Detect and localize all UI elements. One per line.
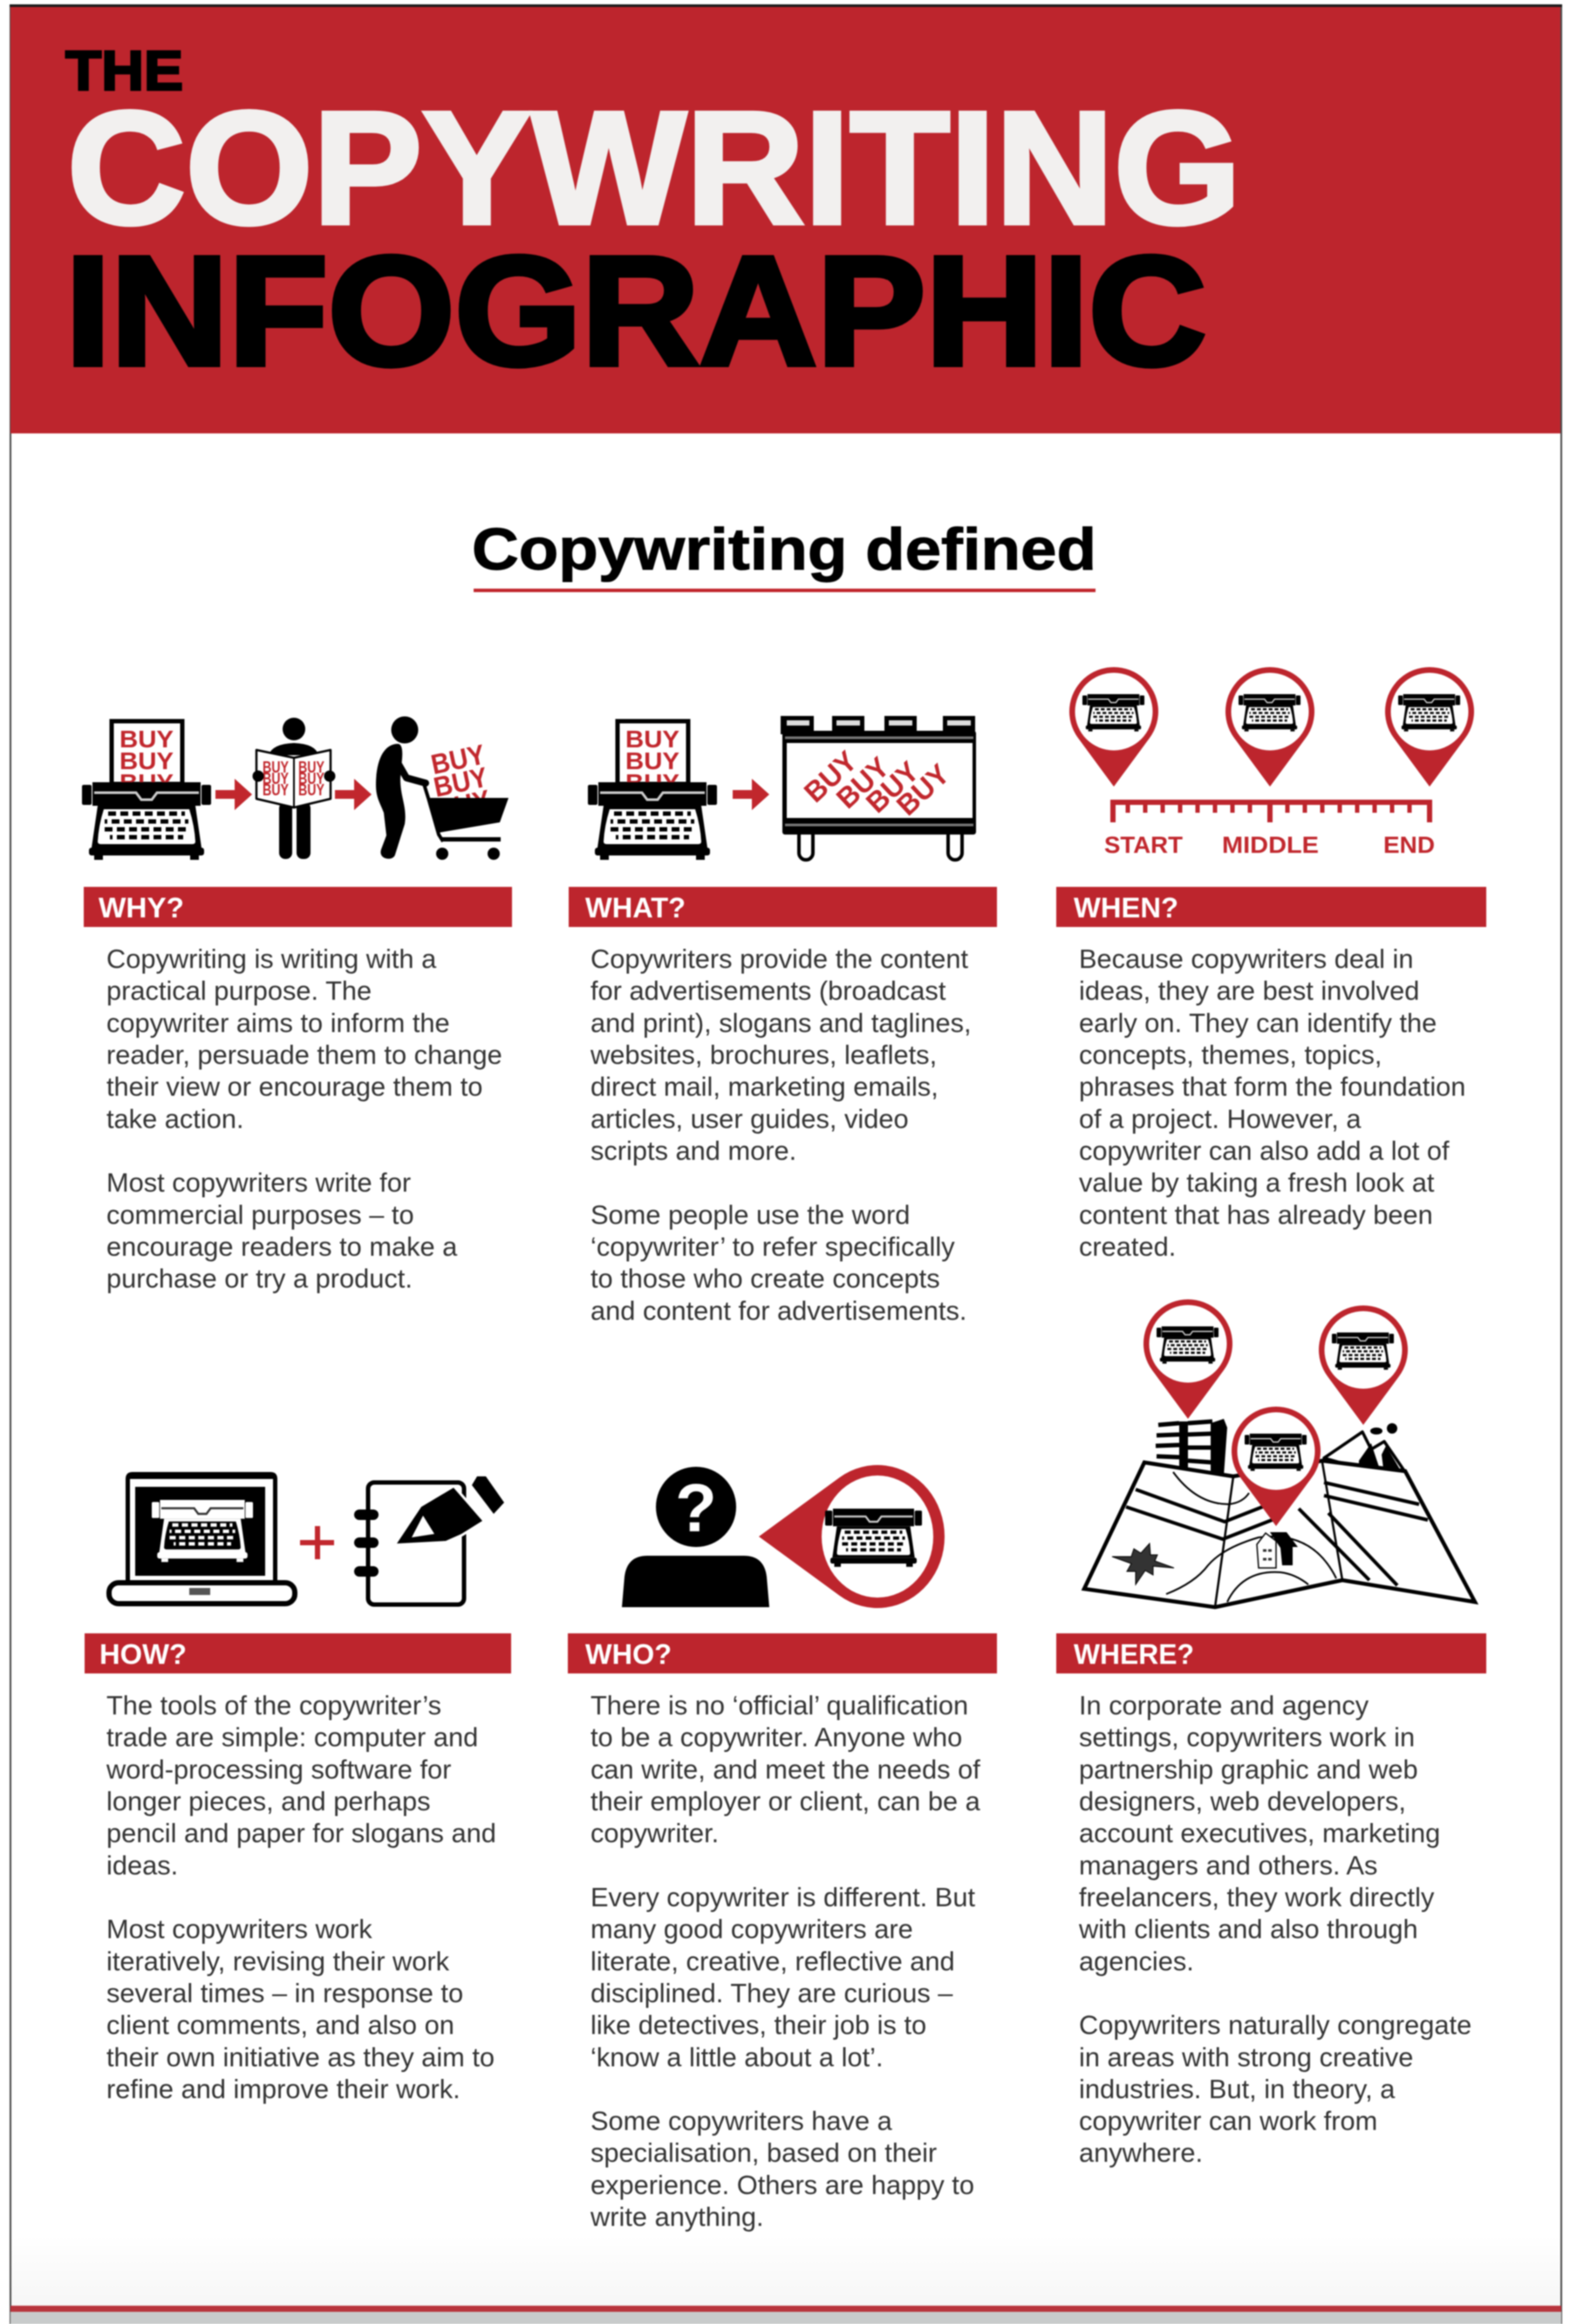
icon: person reading newspaper: BUY bbox=[263, 770, 289, 787]
timeline ruler: MIDDLE bbox=[1222, 832, 1319, 858]
text: when: Because copywriters deal in bbox=[1079, 944, 1413, 974]
heading: Copywriting defined: Copywriting defined bbox=[472, 516, 1096, 583]
text: how: The tools of the copywriter’s bbox=[106, 1690, 441, 1721]
text: when: early on. They can identify the bbox=[1079, 1007, 1437, 1038]
text: where: agencies. bbox=[1079, 1946, 1194, 1976]
panel: why bbox=[82, 717, 512, 1294]
icon: billboard bbox=[781, 716, 976, 860]
text: where: In corporate and agency bbox=[1079, 1690, 1369, 1721]
text: why: copywriter aims to inform the bbox=[106, 1007, 450, 1038]
label bar: WHEN? bbox=[1056, 887, 1486, 927]
text: when: created. bbox=[1079, 1231, 1176, 1262]
timeline ruler: START bbox=[1104, 832, 1184, 858]
icon: location pin home bbox=[1232, 1407, 1321, 1526]
icon: location pin start bbox=[1069, 667, 1158, 787]
label bar: WHAT? bbox=[569, 887, 997, 927]
text: how: several times – in response to bbox=[106, 1978, 463, 2008]
text: what: Some people use the word bbox=[590, 1199, 910, 1230]
text: why: take action. bbox=[106, 1103, 244, 1134]
text: who: There is no ‘official’ qualification bbox=[590, 1690, 968, 1721]
text: what: scripts and more. bbox=[590, 1135, 796, 1166]
text: who: write anything. bbox=[590, 2202, 764, 2232]
text: why: Most copywriters write for bbox=[106, 1168, 411, 1198]
text: what: ‘copywriter’ to refer specifically bbox=[590, 1231, 955, 1262]
label bar: WHERE? bbox=[1056, 1633, 1486, 1673]
text: when: value by taking a fresh look at bbox=[1079, 1168, 1435, 1198]
text: when: copywriter can also add a lot of bbox=[1079, 1135, 1450, 1166]
icon: person reading newspaper bbox=[253, 718, 335, 859]
text: how: refine and improve their work. bbox=[106, 2074, 461, 2104]
text: who: specialisation, based on their bbox=[590, 2137, 937, 2168]
icon: laptop with typewriter bbox=[109, 1472, 295, 1604]
text: when: of a project. However, a bbox=[1079, 1103, 1362, 1134]
text: how: iteratively, revising their work bbox=[106, 1946, 450, 1976]
text: why: Copywriting is writing with a bbox=[106, 944, 437, 974]
text: what: articles, user guides, video bbox=[590, 1103, 909, 1134]
icon: person with question mark bbox=[622, 1467, 769, 1607]
text: who: literate, creative, reflective and bbox=[590, 1946, 955, 1976]
icon: person reading newspaper: BUY bbox=[263, 759, 289, 776]
panel: who bbox=[568, 1465, 997, 2232]
icon: typewriter producing BUY copy bbox=[588, 721, 717, 860]
icon: shopper with cart: BUY bbox=[431, 761, 490, 803]
title: INFOGRAPHIC: INFOGRAPHIC bbox=[65, 224, 1206, 398]
text: where: industries. But, in theory, a bbox=[1079, 2074, 1396, 2104]
text: who: Some copywriters have a bbox=[590, 2106, 893, 2137]
icon: location pin middle bbox=[1225, 667, 1314, 787]
icon: location pin end bbox=[1385, 667, 1474, 787]
text: why: encourage readers to make a bbox=[106, 1231, 458, 1262]
text: how: their own initiative as they aim to bbox=[106, 2041, 495, 2072]
label bar: WHO? bbox=[568, 1633, 997, 1673]
text: why: reader, persuade them to change bbox=[106, 1039, 502, 1070]
text: when: concepts, themes, topics, bbox=[1079, 1039, 1382, 1070]
arrow bbox=[733, 779, 769, 810]
text: who: like detectives, their job is to bbox=[590, 2010, 926, 2041]
panel: where bbox=[1056, 1299, 1486, 2168]
text: what: Copywriters provide the content bbox=[590, 944, 969, 974]
text: where: with clients and also through bbox=[1078, 1914, 1418, 1945]
text: when: phrases that form the foundation bbox=[1079, 1072, 1465, 1102]
icon: shopper with cart: BUY bbox=[428, 739, 488, 780]
icon: billboard: BUY bbox=[860, 755, 925, 819]
text: where: partnership graphic and web bbox=[1079, 1754, 1418, 1784]
text: who: many good copywriters are bbox=[590, 1914, 913, 1945]
label bar: WHY?: WHY? bbox=[99, 892, 184, 923]
text: how: Most copywriters work bbox=[106, 1914, 372, 1945]
label bar: HOW? bbox=[85, 1633, 511, 1673]
text: where: account executives, marketing bbox=[1079, 1818, 1440, 1849]
text: who: to be a copywriter. Anyone who bbox=[590, 1722, 962, 1753]
label bar: WHY? bbox=[84, 887, 512, 927]
icon: billboard: BUY bbox=[798, 745, 864, 808]
icon: building bbox=[1156, 1419, 1227, 1476]
icon: person reading newspaper: BUY bbox=[263, 781, 289, 799]
text: who: Every copywriter is different. But bbox=[590, 1882, 975, 1912]
text: what: and print), slogans and taglines, bbox=[590, 1007, 972, 1038]
label bar: HOW?: HOW? bbox=[99, 1639, 187, 1670]
icon: shopper with cart bbox=[376, 717, 509, 860]
timeline ruler bbox=[1104, 800, 1435, 858]
text: where: copywriter can work from bbox=[1079, 2106, 1377, 2137]
text: where: Copywriters naturally congregate bbox=[1079, 2010, 1471, 2041]
icon: person reading newspaper: BUY bbox=[298, 759, 324, 776]
icon: billboard: BUY bbox=[891, 758, 956, 821]
text: when: content that has already been bbox=[1079, 1199, 1433, 1230]
icon: folded map bbox=[1084, 1461, 1475, 1607]
title: THE: THE bbox=[65, 39, 183, 102]
arrow bbox=[215, 779, 252, 810]
label bar: WHO?: WHO? bbox=[585, 1639, 672, 1670]
label bar: WHEN?: WHEN? bbox=[1074, 892, 1178, 923]
text: where: managers and others. As bbox=[1079, 1850, 1377, 1880]
icon: pin pointing to typewriter bbox=[759, 1465, 945, 1608]
icon: mountain and clouds bbox=[1324, 1423, 1405, 1474]
panel: what bbox=[569, 716, 997, 1326]
icon: location pin mountain bbox=[1319, 1305, 1408, 1425]
text: who: their employer or client, can be a bbox=[590, 1786, 981, 1816]
icon: plus bbox=[300, 1526, 334, 1559]
label bar: WHERE?: WHERE? bbox=[1074, 1639, 1194, 1670]
icon: person reading newspaper: BUY bbox=[298, 770, 324, 787]
text: who: ‘know a little about a lot’. bbox=[590, 2041, 884, 2072]
text: what: to those who create concepts bbox=[590, 1264, 940, 1294]
text: why: purchase or try a product. bbox=[106, 1264, 413, 1294]
text: who: copywriter. bbox=[590, 1818, 719, 1849]
text: why: commercial purposes – to bbox=[106, 1199, 414, 1230]
text: how: word-processing software for bbox=[106, 1754, 451, 1784]
label bar: WHAT?: WHAT? bbox=[585, 892, 686, 923]
text: what: for advertisements (broadcast bbox=[590, 976, 946, 1006]
text: when: ideas, they are best involved bbox=[1079, 976, 1419, 1006]
text: who: disciplined. They are curious – bbox=[590, 1978, 953, 2008]
text: where: freelancers, they work directly bbox=[1079, 1882, 1435, 1912]
text: what: and content for advertisements. bbox=[590, 1295, 966, 1326]
text: who: can write, and meet the needs of bbox=[590, 1754, 980, 1784]
text: where: settings, copywriters work in bbox=[1079, 1722, 1415, 1753]
timeline ruler: END bbox=[1383, 832, 1435, 858]
text: what: direct mail, marketing emails, bbox=[590, 1072, 939, 1102]
arrow bbox=[335, 779, 372, 810]
icon: billboard: BUY bbox=[830, 751, 896, 814]
panel: when bbox=[1056, 667, 1486, 1262]
text: how: longer pieces, and perhaps bbox=[106, 1786, 431, 1816]
text: how: ideas. bbox=[106, 1850, 178, 1880]
icon: location pin office bbox=[1143, 1299, 1232, 1419]
text: how: trade are simple: computer and bbox=[106, 1722, 478, 1753]
text: how: pencil and paper for slogans and bbox=[106, 1818, 496, 1849]
text: what: websites, brochures, leaflets, bbox=[590, 1039, 937, 1070]
text: how: client comments, and also on bbox=[106, 2010, 454, 2041]
icon: person reading newspaper: BUY bbox=[298, 781, 324, 799]
footer band bbox=[10, 2306, 1561, 2324]
header banner bbox=[10, 7, 1560, 433]
icon: person with question mark: ? bbox=[675, 1469, 717, 1546]
text: where: anywhere. bbox=[1079, 2137, 1203, 2168]
text: why: their view or encourage them to bbox=[106, 1072, 482, 1102]
text: where: in areas with strong creative bbox=[1079, 2041, 1413, 2072]
icon: notebook and pencil bbox=[354, 1476, 504, 1605]
text: why: practical purpose. The bbox=[106, 976, 372, 1006]
text: where: designers, web developers, bbox=[1079, 1786, 1406, 1816]
text: who: experience. Others are happy to bbox=[590, 2170, 974, 2200]
title: COPYWRITING: COPYWRITING bbox=[67, 78, 1241, 257]
icon: shopper with cart: BUY bbox=[433, 784, 493, 826]
panel: how bbox=[85, 1472, 511, 2104]
icon: typewriter producing BUY copy bbox=[82, 721, 211, 860]
